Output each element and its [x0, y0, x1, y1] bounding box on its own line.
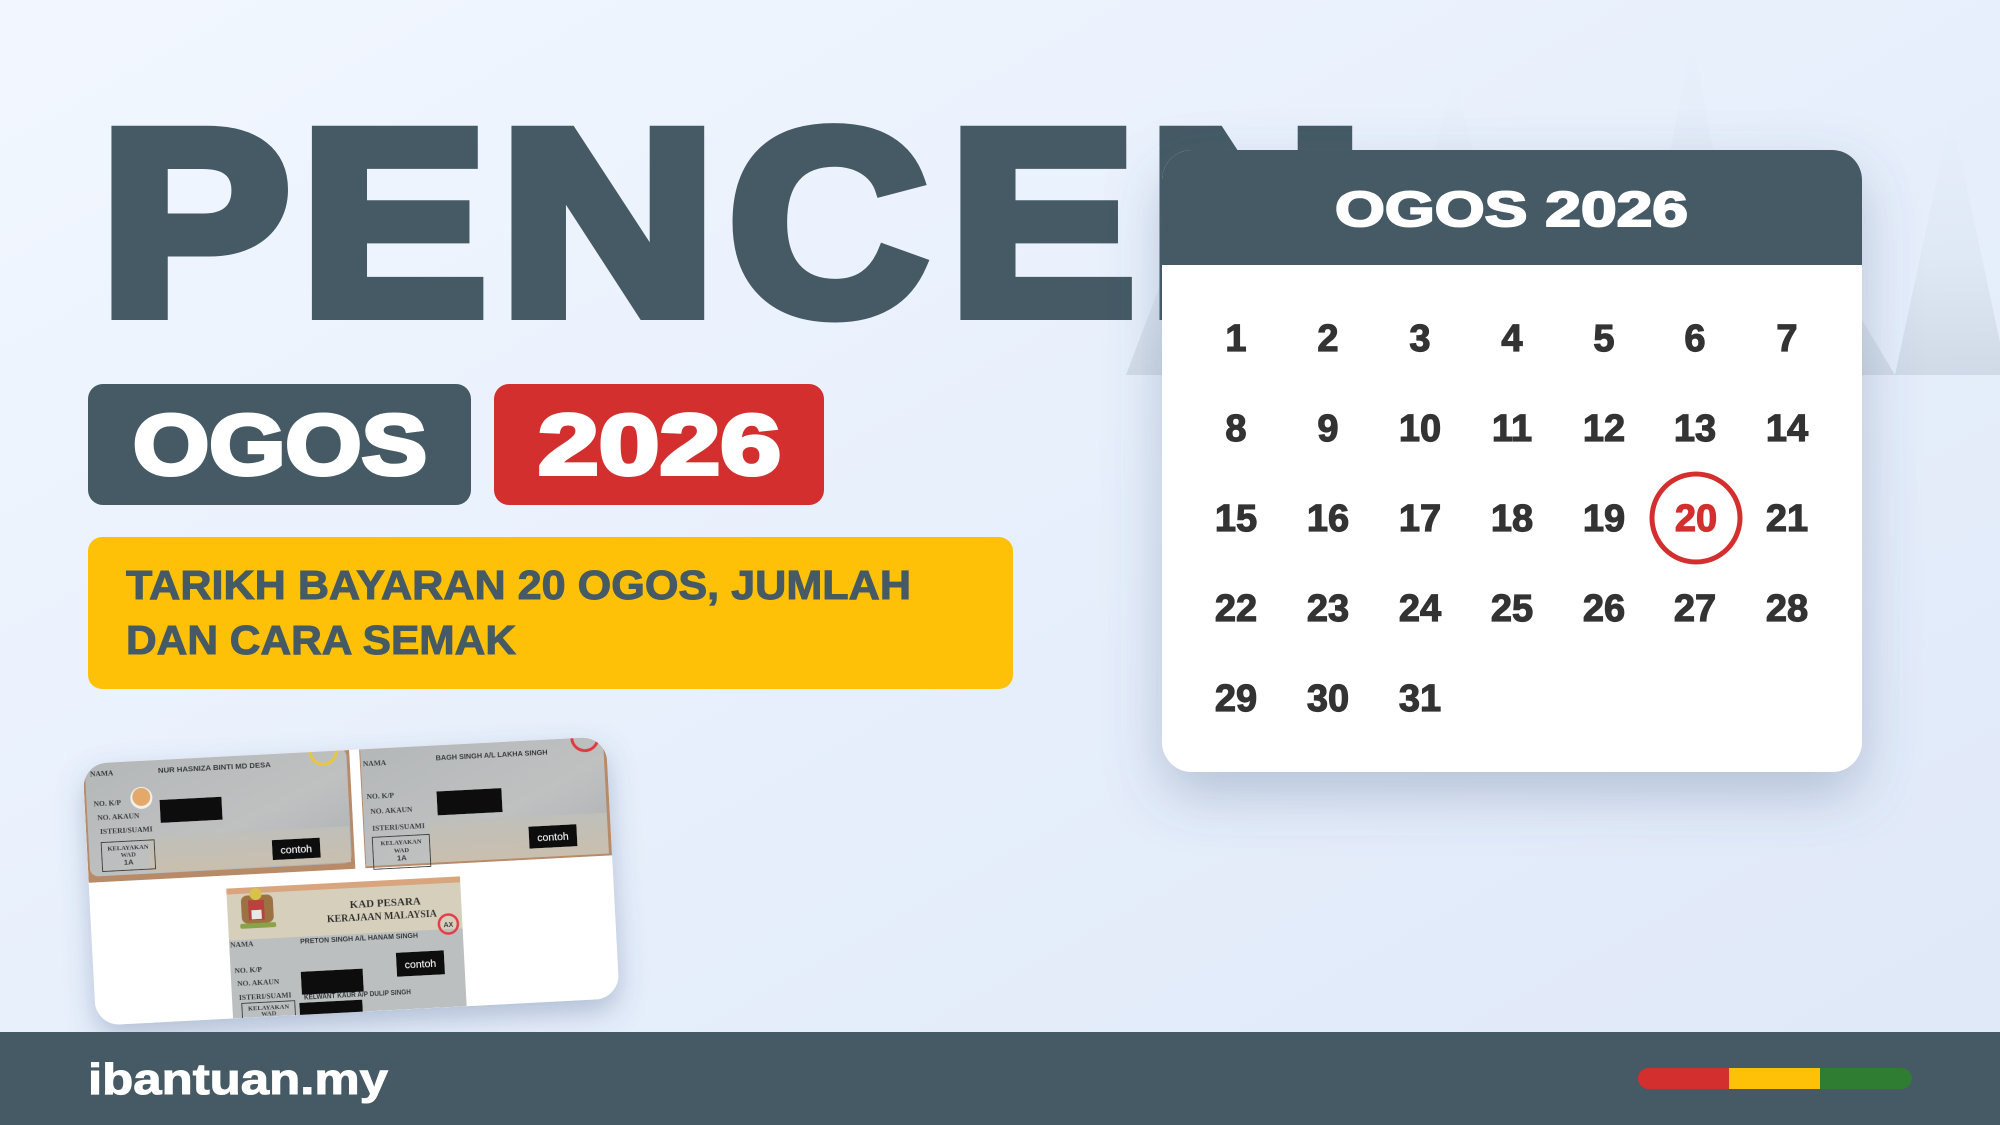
title: E — [301, 77, 487, 369]
calendar header — [1162, 150, 1862, 265]
sample card 2: NAMA — [363, 758, 387, 768]
title — [100, 76, 1364, 369]
calendar dates: 15 — [1215, 498, 1257, 540]
calendar dates: 22 — [1215, 588, 1257, 630]
calendar dates: 4 — [1501, 318, 1523, 360]
sample card 3: KERAJAAN MALAYSIA — [327, 909, 438, 925]
calendar dates: 11 — [1492, 408, 1532, 450]
sample card 1 — [82, 737, 355, 883]
calendar dates: 18 — [1491, 498, 1533, 540]
sample card 1: KELAYAKAN — [107, 844, 149, 853]
sample card 3: NAMA — [230, 939, 254, 949]
sample card 2: NO. AKAUN — [370, 805, 413, 816]
sample card 3: AX — [443, 922, 454, 929]
title: C — [729, 76, 927, 369]
footer site name: ibantuan.my — [88, 1055, 389, 1104]
photo card: pension card samples — [82, 723, 622, 1031]
calendar dates: 3 — [1409, 318, 1431, 360]
calendar dates: 7 — [1776, 318, 1798, 360]
calendar dates: 9 — [1317, 408, 1339, 450]
sample card 3: KAD PESARA — [349, 895, 421, 911]
sample card 3 — [226, 876, 467, 1024]
calendar dates: 29 — [1215, 678, 1257, 720]
title: N — [1147, 76, 1364, 369]
footer bar — [0, 1032, 2000, 1125]
calendar panel — [1162, 150, 1862, 772]
subtitle banner: TARIKH BAYARAN 20 OGOS, JUMLAH — [126, 562, 911, 608]
calendar dates: 1 — [1225, 318, 1247, 360]
calendar dates: 25 — [1491, 588, 1533, 630]
sample card 3: KELAYAKAN — [248, 1003, 290, 1013]
subtitle banner — [88, 537, 1013, 689]
sample card 2: NO. K/P — [366, 791, 395, 801]
sample card 2 — [359, 738, 612, 870]
sample card 2: KELAYAKAN — [380, 838, 422, 847]
calendar dates: 2 — [1317, 318, 1339, 360]
sample card 3: KELWANT KAUR A/P DULIP SINGH — [304, 989, 411, 1002]
subtitle banner: DAN CARA SEMAK — [126, 617, 516, 663]
badge: OGOS: OGOS — [133, 398, 427, 493]
badge: 2026: 2026 — [538, 398, 781, 493]
decorative triangles — [1126, 38, 2000, 375]
calendar dates: 24 — [1399, 588, 1441, 630]
sample card 1: NO. AKAUN — [97, 811, 140, 822]
highlighted date: 20: 20 — [1675, 498, 1717, 540]
calendar dates: 21 — [1766, 498, 1808, 540]
calendar dates: 8 — [1225, 408, 1247, 450]
sample card 3: contoh — [404, 958, 437, 971]
calendar dates: 12 — [1583, 408, 1625, 450]
sample card 3: WAD — [261, 1010, 277, 1018]
sample card 2: ISTERI/SUAMI — [372, 821, 425, 833]
highlighted date: 20 — [1652, 474, 1740, 562]
sample card 1: contoh — [280, 843, 313, 857]
sample card 1: WAD — [121, 851, 136, 859]
calendar header: OGOS 2026 — [1335, 183, 1688, 237]
colour strip — [1638, 1068, 1912, 1089]
sample card 3: NO. K/P — [234, 965, 263, 975]
calendar dates: 13 — [1674, 408, 1716, 450]
calendar dates: 19 — [1583, 498, 1625, 540]
sample card 1: 1A — [124, 857, 134, 867]
sample card 2: 1A — [397, 853, 407, 863]
sample card 1: NUR HASNIZA BINTI MD DESA — [158, 760, 272, 775]
calendar dates — [1215, 318, 1808, 720]
calendar dates: 26 — [1583, 588, 1625, 630]
sample card 3: PRETON SINGH A/L HANAM SINGH — [300, 931, 418, 946]
sample card 1: ISTERI/SUAMI — [100, 824, 153, 836]
calendar dates: 28 — [1766, 588, 1808, 630]
calendar dates: 6 — [1684, 318, 1706, 360]
sample card 2: WAD — [394, 847, 410, 855]
calendar dates: 31 — [1399, 678, 1441, 720]
calendar dates: 5 — [1593, 318, 1615, 360]
calendar dates: 27 — [1674, 588, 1716, 630]
sample card 2: contoh — [537, 831, 569, 844]
sample card 3: ISTERI/SUAMI — [239, 990, 292, 1002]
calendar dates: 30 — [1307, 678, 1349, 720]
calendar dates: 14 — [1766, 408, 1808, 450]
calendar dates: 16 — [1307, 498, 1349, 540]
calendar dates: 23 — [1307, 588, 1349, 630]
badge: 2026 — [494, 384, 824, 505]
sample card 2: BAGH SINGH A/L LAKHA SINGH — [435, 748, 548, 762]
sample card 3: NO. AKAUN — [237, 977, 280, 988]
title: P — [100, 77, 290, 369]
calendar dates: 10 — [1399, 408, 1441, 450]
title: E — [949, 77, 1135, 369]
title: N — [499, 76, 716, 369]
sample card 1: NAMA — [90, 768, 114, 779]
calendar dates: 17 — [1399, 498, 1441, 540]
badge: OGOS — [88, 384, 471, 505]
crest — [238, 887, 276, 929]
sample card 1: NO. K/P — [93, 798, 122, 808]
